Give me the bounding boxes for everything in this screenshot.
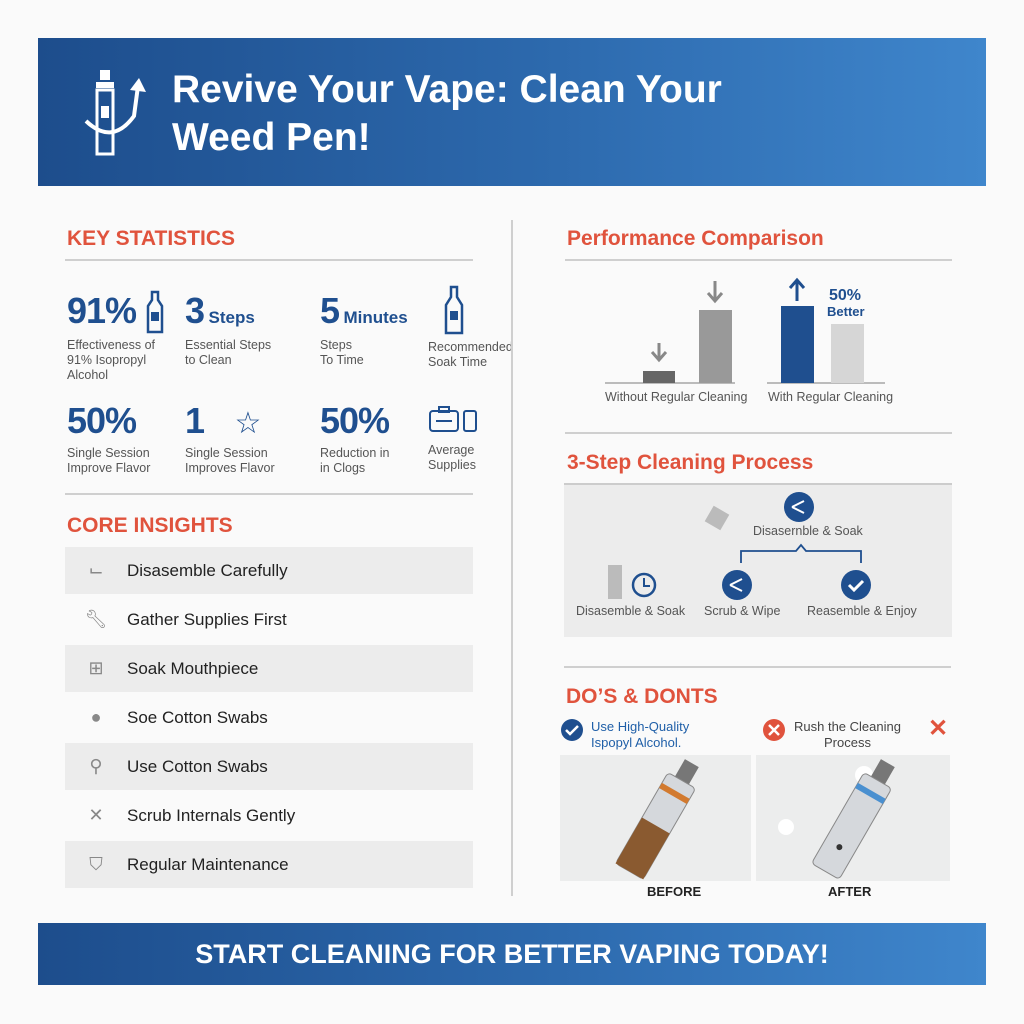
item 3 <box>65 645 473 692</box>
stat: 91%: Alcohol <box>67 368 108 382</box>
footer banner <box>38 923 986 985</box>
stat: 50% flavor: Improve Flavor <box>67 461 150 475</box>
item 5: Use Cotton Swabs <box>127 756 268 776</box>
item 1 <box>65 547 473 594</box>
stat: 3 steps <box>185 290 271 367</box>
stat: 50% clogs: in Clogs <box>320 461 365 475</box>
stat: supplies <box>428 406 477 472</box>
stat: 3 steps: 3 Steps <box>185 290 255 331</box>
item 1: ⌙ <box>88 560 104 580</box>
bar chart: performance: Without Regular Cleaning <box>605 390 747 404</box>
icon: bottle <box>146 290 164 334</box>
footer banner: START CLEANING FOR BETTER VAPING TODAY! <box>195 939 829 969</box>
heading: 3-step: 3-Step Cleaning Process <box>567 451 813 474</box>
stat: 5 minutes: To Time <box>320 353 364 367</box>
stat: 50% flavor: Single Session <box>67 446 150 460</box>
stat: soak time <box>428 286 513 369</box>
item 5 <box>65 743 473 790</box>
stat: supplies: Average <box>428 443 474 457</box>
image: before <box>560 755 751 881</box>
bar chart: performance: Better <box>827 304 865 319</box>
item 4: ● <box>91 707 101 727</box>
do item: Use High-Quality <box>591 719 689 734</box>
do item <box>561 719 690 750</box>
heading: core insights: CORE INSIGHTS <box>67 514 233 537</box>
stat: 1 star: 1 ☆ <box>185 400 261 441</box>
icon: vape pen with arrow <box>84 70 146 156</box>
panel: 3-step process: Reasemble & Enjoy <box>807 604 917 618</box>
panel: 3-step process: Disasernble & Soak <box>753 524 863 538</box>
stat: 5 minutes <box>320 290 408 367</box>
stat: 3 steps: Essential Steps <box>185 338 271 352</box>
stat: 91%: 91% Isopropyl <box>67 353 146 367</box>
stat: 5 minutes: Steps <box>320 338 352 352</box>
step 3 <box>841 570 871 600</box>
stat: 50% flavor <box>67 400 150 475</box>
stat: 50% clogs: Reduction in <box>320 446 390 460</box>
bar chart: performance <box>605 278 893 404</box>
stat: 50% clogs: 50% <box>320 400 389 441</box>
item 7: ⛉ <box>89 854 103 874</box>
stat: supplies: Supplies <box>428 458 476 472</box>
step 1 <box>608 565 656 599</box>
stat: 91%: Effectiveness of <box>67 338 155 352</box>
title <box>172 68 722 159</box>
item 3: ⊞ <box>88 658 104 678</box>
stat: 1 star <box>185 400 275 475</box>
stat: 1 star: Single Session <box>185 446 268 460</box>
dont item: Process <box>824 735 871 750</box>
stat: soak time: Recommended <box>428 340 513 354</box>
item 4: Soe Cotton Swabs <box>127 708 268 726</box>
caption: before: BEFORE <box>647 884 701 899</box>
stat: 91% <box>67 290 155 382</box>
bar chart: performance: 50% <box>829 287 861 304</box>
item 5: ⚲ <box>89 756 103 776</box>
title: Weed Pen! <box>172 116 371 159</box>
dont item <box>763 715 948 750</box>
dont item: Rush the Cleaning <box>794 719 901 734</box>
title: Revive Your Vape: Clean Your <box>172 68 722 111</box>
item 3: Soak Mouthpiece <box>127 658 258 678</box>
stat: 91%: 91% <box>67 290 136 331</box>
item 7 <box>65 841 473 888</box>
heading: dos and donts: DO’S & DONTS <box>566 685 718 708</box>
stat: 1 star: Improves Flavor <box>185 461 275 475</box>
item 6: ✕ <box>88 805 104 825</box>
stat: 50% flavor: 50% <box>67 400 136 441</box>
caption: after: AFTER <box>828 884 871 899</box>
stat: 3 steps: to Clean <box>185 353 232 367</box>
header banner <box>38 38 986 186</box>
dont item: ✕ <box>928 715 948 742</box>
item 1: Disasemble Carefully <box>127 560 288 580</box>
item 2: Gather Supplies First <box>127 610 287 628</box>
item 2: 🔧︎ <box>85 609 107 629</box>
panel: 3-step process: Disasemble & Soak <box>576 604 685 618</box>
heading: performance comparison: Performance Comparison <box>567 227 824 250</box>
item 6: Scrub Internals Gently <box>127 806 295 824</box>
stat: soak time: Soak Time <box>428 355 487 369</box>
step 2 <box>722 570 752 600</box>
image: after <box>756 755 950 881</box>
top step <box>704 492 814 530</box>
bar chart: performance: With Regular Cleaning <box>768 390 893 404</box>
panel: 3-step process <box>564 483 952 637</box>
panel: 3-step process: Scrub & Wipe <box>704 604 780 618</box>
stat: 5 minutes: 5 Minutes <box>320 290 408 331</box>
item 7: Regular Maintenance <box>127 854 289 874</box>
stat: 50% clogs <box>320 400 390 475</box>
list: core insights <box>65 547 473 888</box>
heading: KEY STATISTICS <box>67 227 235 250</box>
do item: Ispopyl Alcohol. <box>591 735 681 750</box>
